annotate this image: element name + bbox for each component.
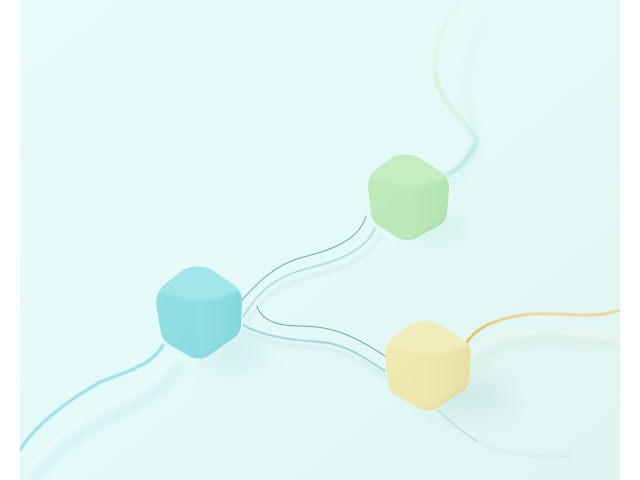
wire: yellow cube thin tail <box>438 410 570 456</box>
cube: green <box>368 154 449 240</box>
shadows under cubes <box>196 214 508 418</box>
wire: green cube to top <box>432 12 480 178</box>
cube: blue <box>156 266 242 358</box>
cube: yellow <box>385 320 471 410</box>
wire: thin lines blue cube to yellow cube <box>243 306 385 377</box>
wire: thin lines blue cube to green cube <box>242 216 380 322</box>
wire: blue thick lower-left <box>20 345 178 480</box>
wire: yellow cube gold line <box>467 310 620 366</box>
